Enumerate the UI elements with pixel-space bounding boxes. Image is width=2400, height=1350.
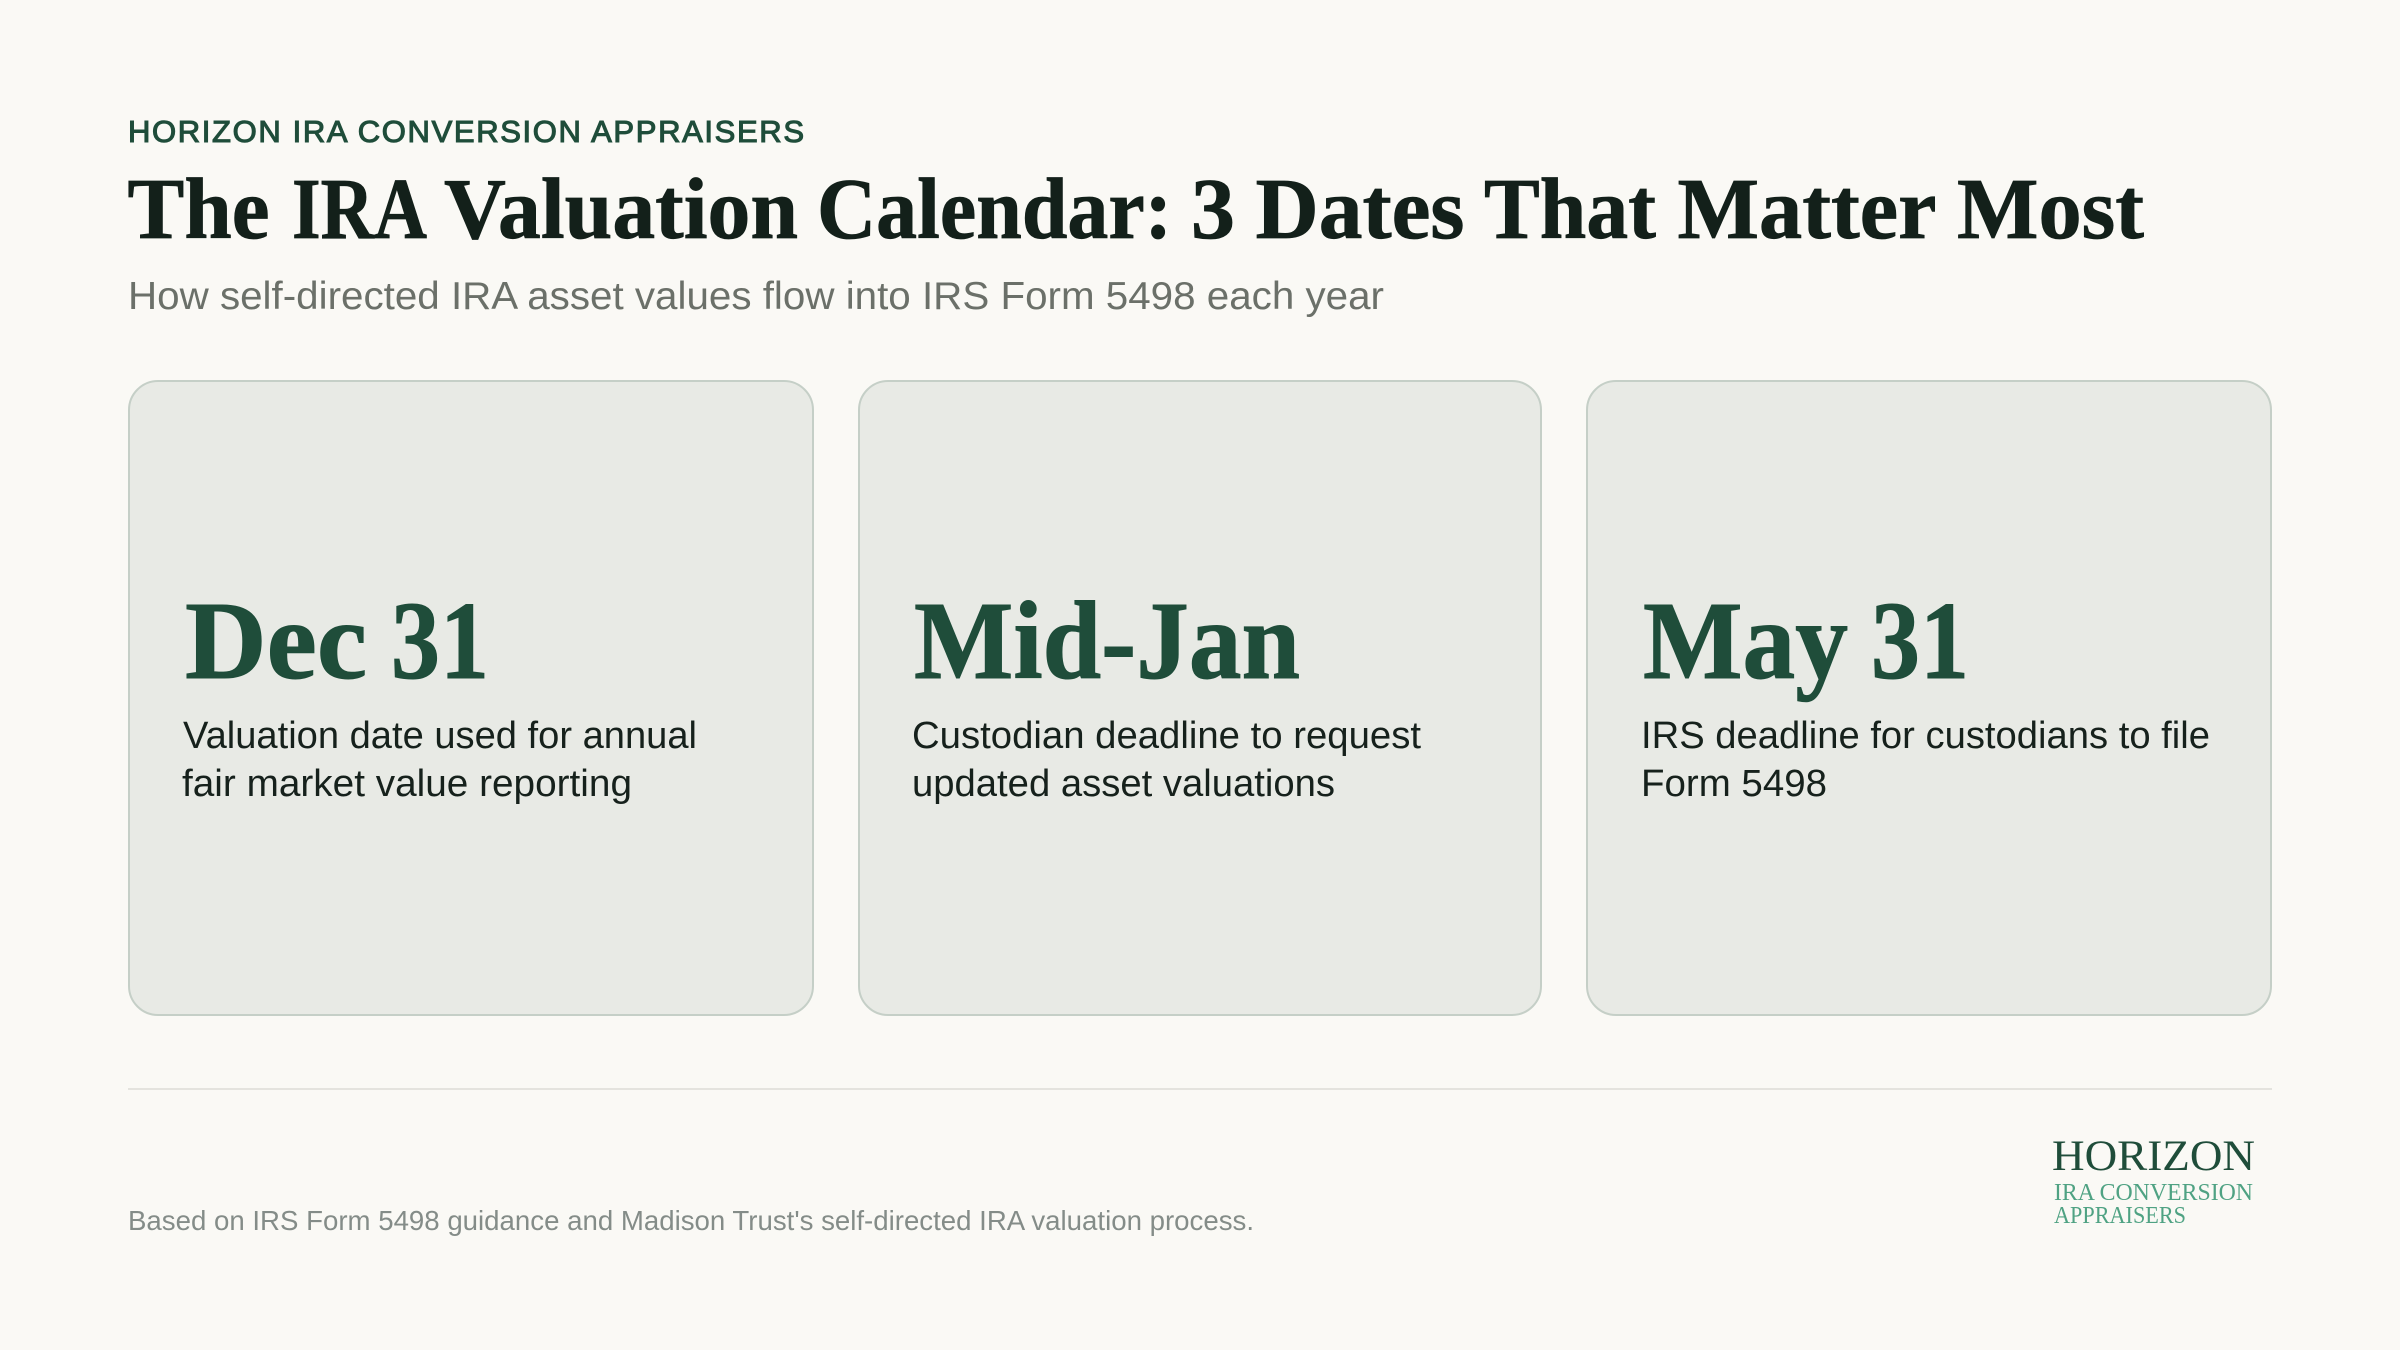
panel: Mid-Jan	[859, 381, 1541, 1015]
title: Most	[1957, 160, 2144, 257]
description: Dec 31	[182, 715, 697, 805]
title: 3	[1191, 160, 1235, 257]
description: Dec 31: Valuation date used for annual	[183, 715, 697, 757]
description: May 31: Form 5498	[1641, 763, 1827, 805]
title: Valuation	[444, 160, 798, 257]
title: That	[1484, 160, 1656, 257]
date: Dec 31: Dec	[185, 580, 367, 703]
logo: Horizon IRA Conversion Appraisers: HORIZON	[2052, 1133, 2255, 1180]
date: May 31: 31	[1871, 580, 1969, 703]
subtitle: How self-directed IRA asset values flow into IRS Form 5498 each year	[128, 275, 1384, 318]
title: IRA	[292, 160, 427, 257]
date: Dec 31: 31	[391, 580, 489, 703]
date: Mid-Jan: Mid-Jan	[914, 580, 1300, 703]
panel: May 31	[1587, 381, 2271, 1015]
title: Calendar:	[817, 160, 1172, 257]
footer source note: Based on IRS Form 5498 guidance and Madison Trust's self-directed IRA valuation process.	[128, 1205, 1254, 1236]
description: Dec 31: fair market value reporting	[182, 763, 632, 805]
date: Dec 31	[185, 580, 489, 703]
title: The	[128, 160, 270, 257]
title: Matter	[1678, 160, 1936, 257]
description: Mid-Jan	[912, 715, 1421, 805]
logo: Horizon IRA Conversion Appraisers: IRA CONVERSION	[2054, 1180, 2253, 1206]
eyebrow: company name: HORIZON IRA CONVERSION APPRAISERS	[128, 114, 804, 149]
title: Dates	[1256, 160, 1464, 257]
date: May 31	[1643, 580, 1969, 703]
description: Mid-Jan: updated asset valuations	[912, 763, 1335, 805]
panel: Dec 31	[129, 381, 813, 1015]
title	[128, 160, 2144, 257]
description: May 31	[1641, 715, 2210, 805]
description: May 31: IRS deadline for custodians to file	[1641, 715, 2210, 757]
description: Mid-Jan: Custodian deadline to request	[912, 715, 1421, 757]
date: May 31: May	[1643, 580, 1848, 703]
logo: Horizon IRA Conversion Appraisers	[2052, 1133, 2255, 1229]
logo: Horizon IRA Conversion Appraisers: APPRAISERS	[2054, 1203, 2186, 1229]
